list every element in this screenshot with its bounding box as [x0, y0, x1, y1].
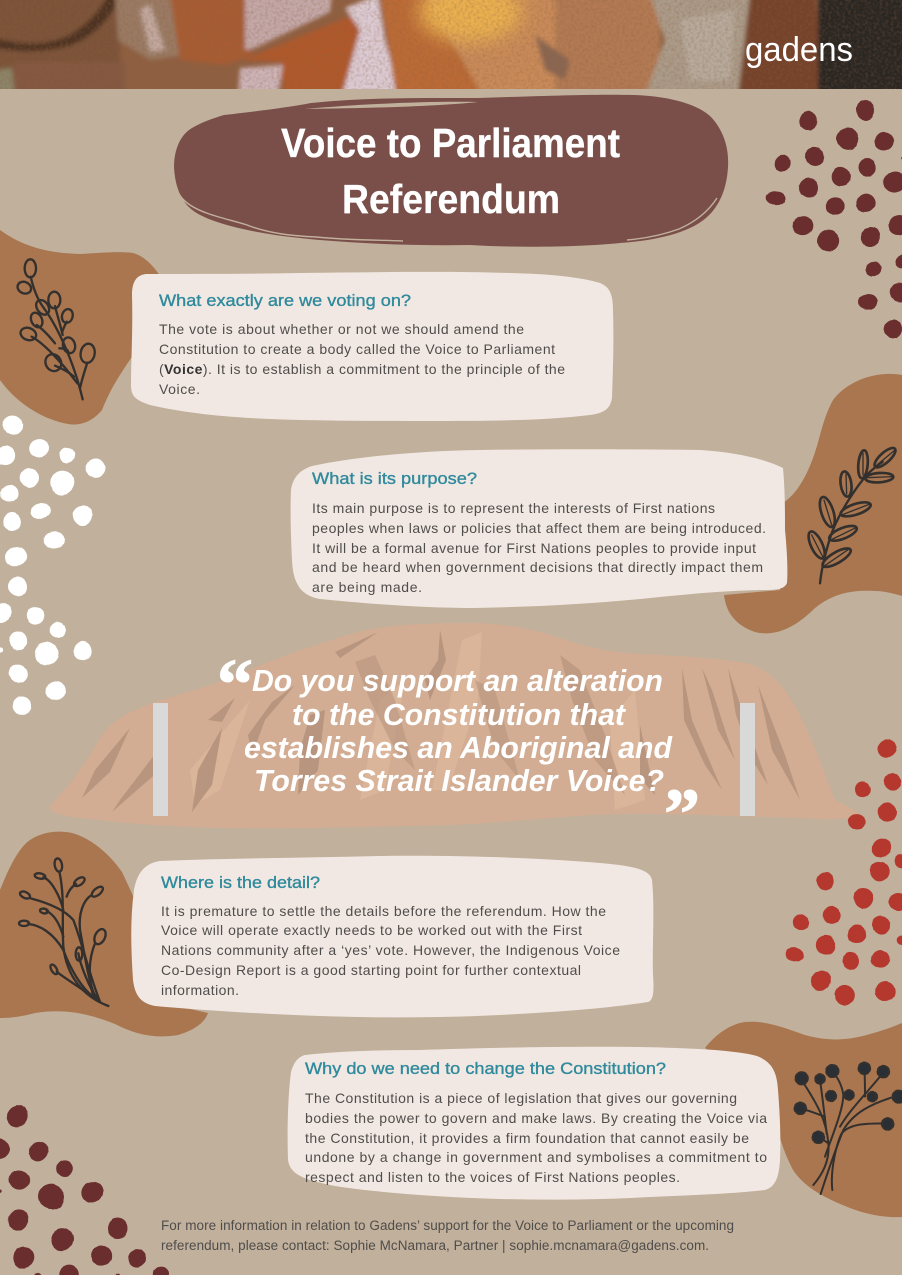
body text: Constitution to create a body called the Voice to Parliament — [159, 341, 555, 357]
icon: flower bouquet lower right — [795, 1063, 902, 1194]
title blob — [174, 95, 728, 247]
body text: respect and listen to the voices of First Nations peoples. — [305, 1169, 680, 1185]
body text: the Constitution, it provides a firm foundation that cannot easily be — [305, 1130, 749, 1146]
closing quotation mark: ” — [664, 774, 700, 854]
bar: right grey quote bar — [740, 703, 755, 816]
body text: The vote is about whether or not we should amend the — [159, 321, 524, 337]
body text: information. — [161, 982, 239, 998]
footer contact note: For more information in relation to Gadens’ support for the Voice to Parliament or the upcoming — [161, 1218, 734, 1233]
blob: lower left — [0, 832, 208, 1036]
title text: Referendum — [342, 176, 560, 222]
body text — [161, 903, 620, 998]
body text: bodies the power to govern and make laws. By creating the Voice via — [305, 1110, 767, 1126]
dots: red right — [786, 739, 902, 1006]
body text: (Voice). It is to establish a commitment to the principle of the — [159, 361, 565, 377]
dots: dark maroon top right — [767, 100, 902, 338]
body text: It is premature to settle the details before the referendum. How the — [161, 903, 606, 919]
pull quote: referendum question: to the Constitution that — [292, 698, 627, 732]
body text: Nations community after a ‘yes’ vote. However, the Indigenous Voice — [161, 942, 620, 958]
body text: Co-Design Report is a good starting point for further contextual — [161, 962, 581, 978]
banner: rock art photograph — [0, 0, 902, 95]
dots: white left — [0, 415, 105, 715]
body text: and be heard when government decisions that directly impact them — [312, 559, 763, 575]
pull quote: referendum question: Torres Strait Islander Voice? — [254, 764, 664, 798]
title text: Voice to Parliament — [281, 120, 620, 166]
illustration: Uluru rock — [50, 623, 860, 828]
heading: What is its purpose? — [312, 470, 477, 488]
body text: are being made. — [312, 579, 422, 595]
heading: Why do we need to change the Constitution? — [305, 1060, 666, 1078]
pull quote: referendum question: establishes an Aboriginal and — [244, 731, 673, 765]
body text — [312, 500, 766, 595]
icon: leaf sprig upper left — [16, 259, 96, 399]
footer contact note — [161, 1218, 734, 1253]
panel: why do we need to change the Constitution — [288, 1047, 780, 1200]
dots: dark maroon bottom left — [0, 1105, 168, 1275]
blob: upper left — [0, 230, 160, 424]
icon: leaf sprig right — [805, 445, 898, 583]
pull quote: referendum question — [217, 644, 700, 854]
heading: What exactly are we voting on? — [159, 292, 411, 310]
icon: grass sprig lower left — [19, 858, 108, 1006]
opening quotation mark: “ — [217, 644, 253, 724]
panel: what is its purpose — [291, 449, 787, 608]
bar: left grey quote bar — [153, 703, 168, 816]
body text: undone by a change in government and symbolises a commitment to — [305, 1149, 767, 1165]
body text — [305, 1090, 767, 1185]
body text: Voice. — [159, 381, 200, 397]
title text — [281, 120, 620, 222]
body text: Its main purpose is to represent the interests of First nations — [312, 500, 715, 516]
body text: Voice will operate exactly needs to be worked out with the First — [161, 922, 582, 938]
blob: right middle — [724, 374, 902, 633]
panel: what exactly are we voting on — [131, 272, 613, 421]
logo: gadens: gadens — [745, 31, 853, 69]
pull quote: referendum question: Do you support an alteration — [252, 664, 663, 698]
body text: peoples when laws or policies that affect them are being introduced. — [312, 520, 766, 536]
body text — [159, 321, 565, 397]
panel: where is the detail — [131, 856, 653, 1017]
footer contact note: referendum, please contact: Sophie McNamara, Partner | sophie.mcnamara@gadens.com. — [161, 1238, 709, 1253]
body text: The Constitution is a piece of legislation that gives our governing — [305, 1090, 737, 1106]
title panel — [174, 95, 728, 247]
blob: lower right — [705, 1022, 902, 1217]
body text: It will be a formal avenue for First Nations peoples to provide input — [312, 540, 756, 556]
heading: Where is the detail? — [161, 874, 320, 892]
